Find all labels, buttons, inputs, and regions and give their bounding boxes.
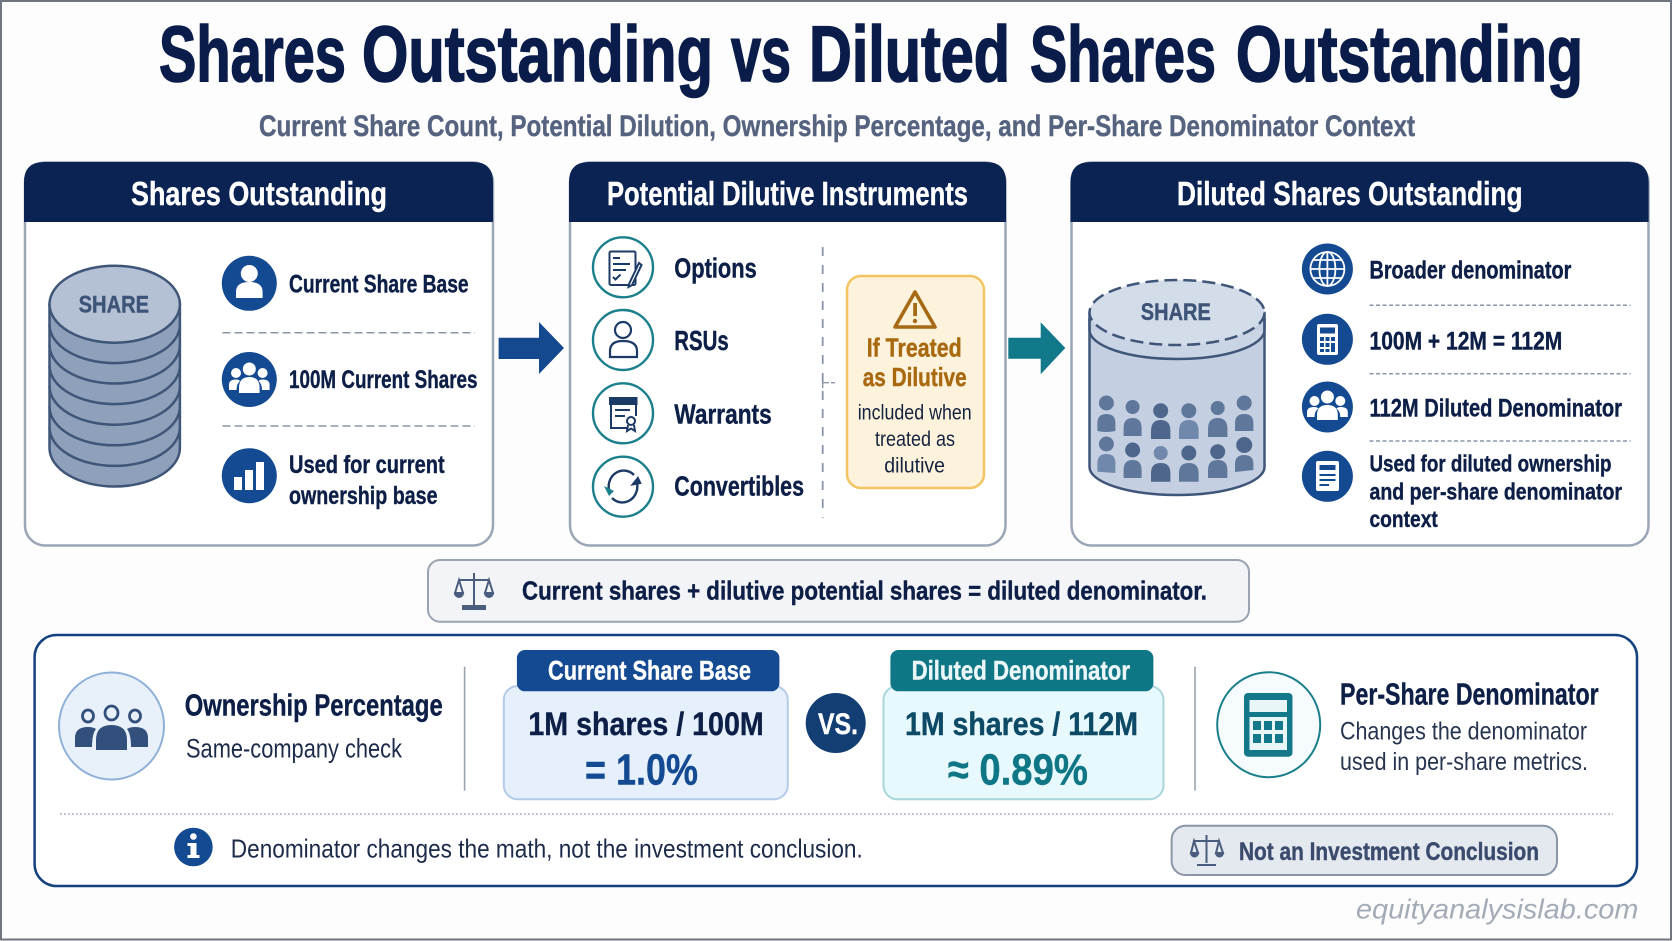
item: 100M + 12M = 112M: 100M + 12M = 112M xyxy=(1370,327,1562,355)
note: denominator changes the math xyxy=(174,828,863,866)
icon: calculator xyxy=(1217,672,1320,777)
card: diluted denominator: 1M shares / 112M xyxy=(905,706,1138,742)
callout: if treated as dilutive: If Treated xyxy=(867,333,962,363)
card: current share base: Current Share Base xyxy=(548,655,751,685)
text: ownership percentage: Same-company check xyxy=(186,733,402,763)
panel: bottom comparison xyxy=(35,635,1637,886)
icon: ownership people xyxy=(59,672,164,780)
text: ownership percentage xyxy=(185,688,443,763)
item: options xyxy=(593,237,757,297)
title: Shares xyxy=(1030,9,1216,98)
note: denominator changes the math: Denominator changes the math, not the investment conclusion. xyxy=(231,833,863,863)
title: Shares xyxy=(159,9,346,98)
pill: not an investment conclusion: Not an Investment Conclusion xyxy=(1239,838,1539,866)
title xyxy=(159,9,1583,98)
item: used for diluted ownership xyxy=(1302,451,1622,532)
formula bar xyxy=(428,560,1249,622)
item: 100M + 12M = 112M xyxy=(1302,314,1562,365)
callout: if treated as dilutive: dilutive xyxy=(884,455,945,478)
heading: diluted shares outstanding: Diluted Shares Outstanding xyxy=(1177,175,1522,212)
heading: shares outstanding: Shares Outstanding xyxy=(131,175,387,212)
item: current ownership base xyxy=(222,448,445,510)
heading: potential dilutive instruments: Potential Dilutive Instruments xyxy=(607,175,968,212)
title: Outstanding xyxy=(362,9,713,98)
item: current share base xyxy=(222,256,469,311)
people inside cylinder xyxy=(1097,396,1253,482)
card: current share base xyxy=(504,650,788,799)
item: broader denominator: Broader denominator xyxy=(1370,257,1572,285)
icon: warning triangle xyxy=(895,292,935,327)
item: 100M current shares: 100M Current Shares xyxy=(289,366,478,394)
title: Diluted xyxy=(809,9,1010,98)
item: current ownership base: ownership base xyxy=(289,482,438,510)
arrow: blue to instruments xyxy=(499,322,564,374)
item: used for diluted ownership: context xyxy=(1370,506,1438,532)
card: current share base: = 1.0% xyxy=(585,745,698,794)
item: 112M diluted denominator xyxy=(1302,382,1622,432)
panel: potential dilutive instruments xyxy=(569,162,1006,546)
formula bar: Current shares + dilutive potential shares = diluted denominator. xyxy=(522,575,1207,605)
item: current ownership base: Used for current xyxy=(289,451,445,479)
item: 100M current shares xyxy=(222,352,478,407)
badge: VS xyxy=(806,693,866,753)
item: used for diluted ownership: and per-share denominator xyxy=(1370,478,1622,504)
item: convertibles xyxy=(593,457,804,517)
text: per-share denominator: used in per-share metrics. xyxy=(1340,748,1588,776)
card: current share base: 1M shares / 100M xyxy=(528,706,764,742)
callout: if treated as dilutive: treated as xyxy=(875,428,955,451)
card: diluted denominator: Diluted Denominator xyxy=(912,655,1130,685)
item: options: Options xyxy=(674,253,757,284)
card: diluted denominator: ≈ 0.89% xyxy=(948,745,1088,794)
text: ownership percentage: Ownership Percentage xyxy=(185,688,443,723)
item: RSUs: RSUs xyxy=(674,325,729,356)
icon: share stack: SHARE xyxy=(79,292,149,319)
item: used for diluted ownership: Used for diluted ownership xyxy=(1370,451,1612,477)
icon: share stack xyxy=(50,266,180,486)
item: broader denominator xyxy=(1302,244,1572,294)
callout: if treated as dilutive: as Dilutive xyxy=(863,362,967,392)
panel: diluted shares outstanding xyxy=(1070,162,1649,546)
item: RSUs xyxy=(593,310,729,370)
icon: diluted share cylinder xyxy=(1090,280,1264,495)
callout: if treated as dilutive xyxy=(847,276,984,488)
text: per-share denominator: Changes the denominator xyxy=(1340,717,1587,745)
pill: not an investment conclusion xyxy=(1172,826,1557,875)
item: warrants xyxy=(593,383,772,443)
callout: if treated as dilutive: included when xyxy=(858,401,972,424)
card: diluted denominator xyxy=(884,650,1164,799)
icon: diluted share cylinder: SHARE xyxy=(1141,299,1211,326)
item: current share base: Current Share Base xyxy=(289,271,469,299)
arrow: teal to diluted xyxy=(1008,322,1065,374)
title: vs xyxy=(731,9,791,98)
item: convertibles: Convertibles xyxy=(674,471,804,502)
subtitle: Current Share Count, Potential Dilution, Ownership Percentage, and Per-Share Denominator Context xyxy=(259,110,1415,143)
text: per-share denominator xyxy=(1340,676,1599,776)
item: warrants: Warrants xyxy=(674,398,772,429)
badge: VS: VS. xyxy=(818,708,858,741)
panel: shares outstanding xyxy=(24,162,493,546)
icon: balance scale xyxy=(455,573,493,609)
watermark: equityanalysislab.com xyxy=(1356,893,1638,924)
